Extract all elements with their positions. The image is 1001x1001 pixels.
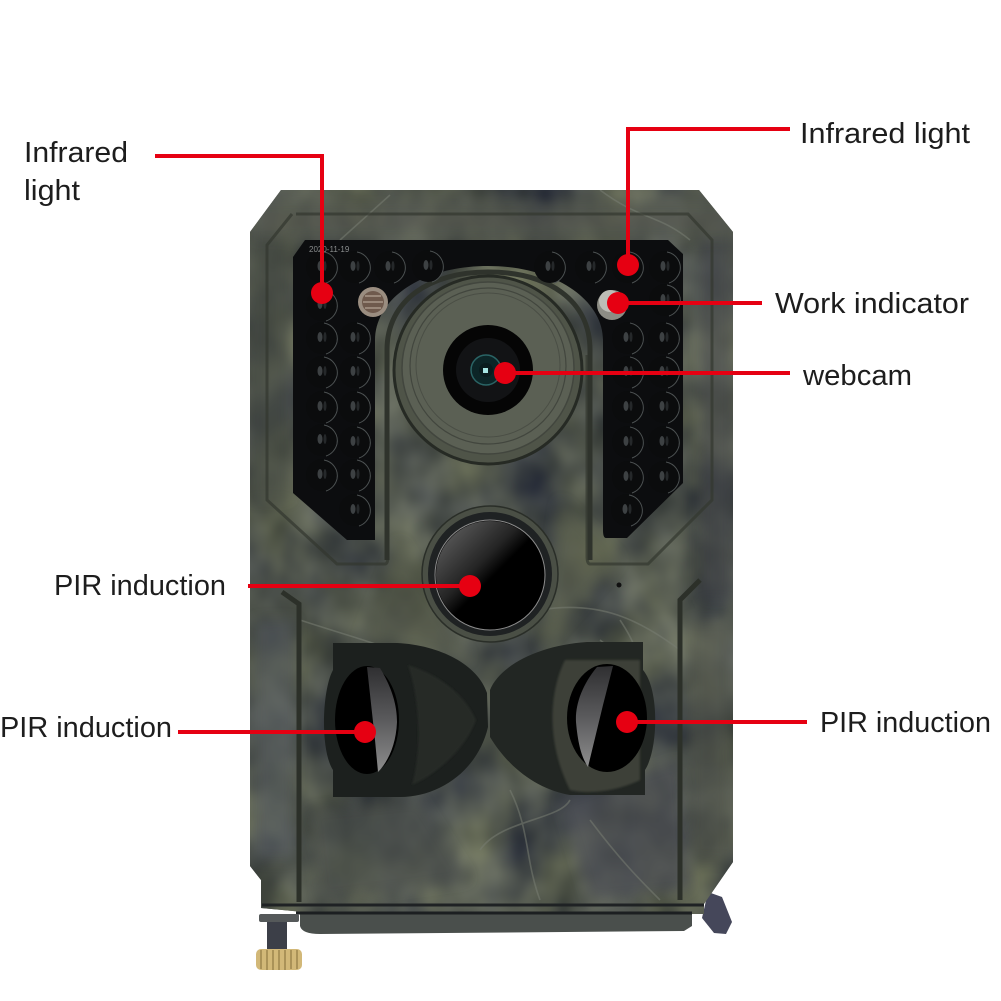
callout: infrared light, right: Infrared light (800, 118, 970, 150)
lens arch (387, 272, 590, 560)
callout: infrared light, left: light (24, 175, 80, 207)
bottom seam (262, 904, 704, 906)
callout: work indicator (607, 288, 969, 320)
callout: PIR induction, right: PIR induction (820, 707, 991, 739)
callout: webcam: webcam (802, 360, 912, 392)
callout: infrared light, right (617, 118, 970, 276)
camouflage texture (245, 185, 740, 920)
callout: infrared light, left (24, 137, 333, 304)
rear clip (702, 892, 732, 934)
left PIR sensor hood (324, 643, 488, 797)
callout: PIR induction, left (0, 712, 376, 744)
lower seam (296, 912, 692, 914)
body shell (250, 190, 733, 914)
callout: work indicator: Work indicator (775, 288, 969, 320)
callout: webcam (494, 360, 912, 392)
microphone hole (616, 582, 622, 588)
right PIR sensor hood (490, 642, 655, 795)
infrared LEDs (306, 250, 681, 526)
lens surround (394, 276, 582, 464)
body bevel lines (267, 214, 712, 564)
webcam lens (443, 325, 533, 415)
light sensor (358, 287, 388, 317)
PIR induction lens (422, 506, 558, 642)
callout: PIR induction, right (616, 707, 991, 739)
callout: PIR induction, left: PIR induction (0, 712, 172, 744)
camera base strip (300, 908, 692, 934)
infrared LED panel (293, 240, 683, 540)
camera body (245, 185, 740, 970)
work indicator LED (597, 290, 627, 320)
date print on panel: 2020-11-19 (309, 245, 350, 254)
callout: PIR induction, center: PIR induction (54, 570, 226, 602)
camouflage branches (300, 190, 690, 900)
callout: infrared light, left: Infrared (24, 137, 128, 169)
tripod screw (256, 914, 302, 970)
callout: PIR induction, center (54, 570, 481, 602)
